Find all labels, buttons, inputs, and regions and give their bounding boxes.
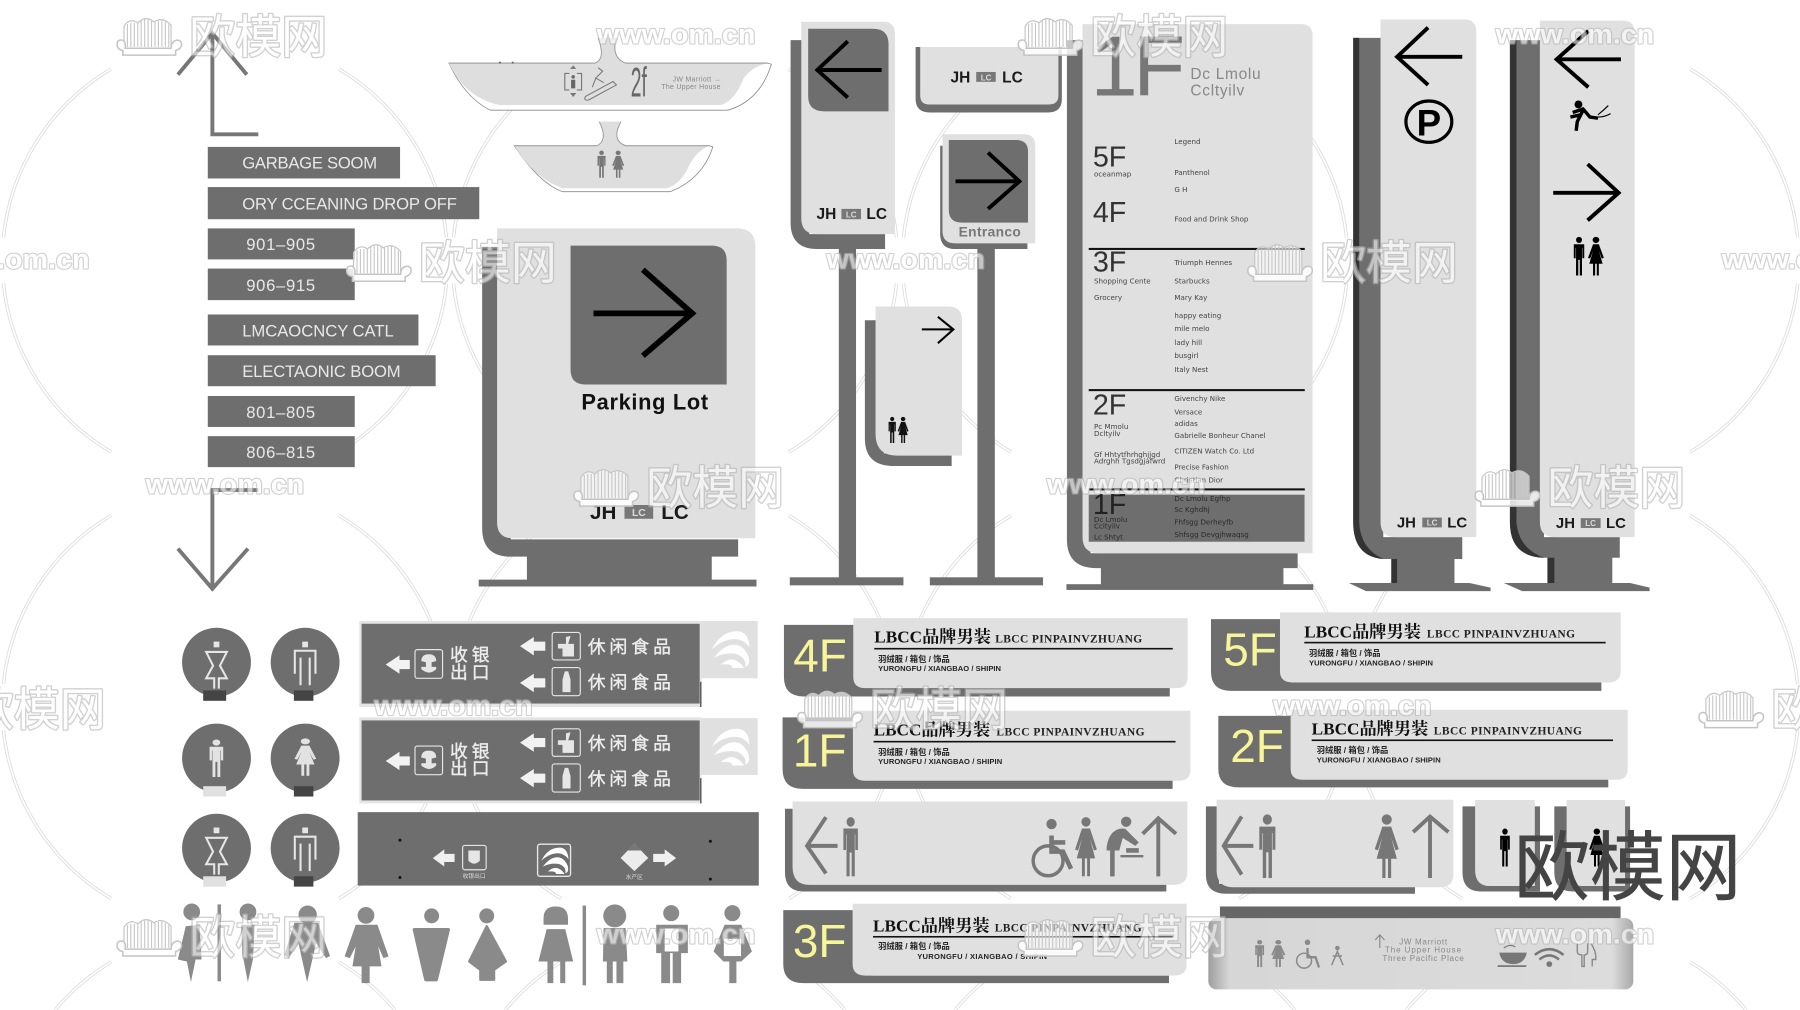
label: garbage room xyxy=(208,147,400,178)
floor sign: 1F: LBCC PINPAINVZHUANG xyxy=(996,727,1145,739)
watermarks: logo and url: 欧模网 xyxy=(870,683,1008,735)
wall sign: JH LC: LC xyxy=(1002,70,1023,87)
ground floor highlighted block: Fhfsgg Derheyfb xyxy=(1174,518,1234,527)
tenant list: mile melo xyxy=(1174,324,1210,333)
floor sign: 4F xyxy=(784,618,1188,696)
watermarks: logo and url: 欧模网 xyxy=(1091,912,1228,964)
label: electronic room xyxy=(208,355,436,386)
icon: restroom people xyxy=(1574,237,1604,275)
brand: JH LC: LC xyxy=(1606,515,1626,532)
floor sign: 2F: 2F xyxy=(1230,720,1284,772)
text: direction: The Upper House xyxy=(1385,946,1462,955)
watermarks: logo and url: www.om.cn xyxy=(1495,918,1654,949)
floor descriptions xyxy=(1094,170,1165,466)
icon: parking P xyxy=(1406,101,1452,143)
icon: escalator xyxy=(585,68,616,100)
floor sign: 1F: LBCC品牌男装 xyxy=(874,720,990,740)
floor numbers xyxy=(1093,141,1126,421)
floor sign: 5F: LBCC品牌男装 xyxy=(1304,622,1421,642)
watermarks: logo and url: 欧模网 xyxy=(189,11,327,63)
floor sign: 5F: LBCC PINPAINVZHUANG xyxy=(1427,629,1575,641)
floor sign: 4F: YURONGFU / XIANGBAO / SHIPIN xyxy=(878,664,1001,673)
label: 806-815 xyxy=(208,436,355,467)
floor sign: 2F: YURONGFU / XIANGBAO / SHIPIN xyxy=(1317,756,1441,765)
watermarks: logo and url: www.om.cn xyxy=(1272,690,1432,721)
tenant list: Legend xyxy=(1174,137,1200,146)
floor sign: 5F: YURONGFU / XIANGBAO / SHIPIN xyxy=(1309,659,1433,668)
floor descriptions: Adrghh Tgsdgjafwrd xyxy=(1094,457,1165,466)
pictogram: half man xyxy=(178,903,202,982)
floor sign: 3F: 羽绒服 / 箱包 / 饰品 xyxy=(878,941,950,951)
floor sign: 1F: YURONGFU / XIANGBAO / SHIPIN xyxy=(878,757,1002,766)
tenant list: Precise Fashion xyxy=(1174,462,1229,471)
label: 906-915: 906–915 xyxy=(246,276,315,295)
supermarket hanging sign 1: 出口 xyxy=(450,662,494,682)
text: direction: Three Pacific Place xyxy=(1382,954,1465,963)
watermarks: logo and url: 欧模网 xyxy=(1091,11,1228,63)
watermarks: logo and url: 欧模网 xyxy=(419,237,557,289)
ground floor highlighted block: Shfsgg Devgjhwaqsg xyxy=(1174,530,1249,539)
watermarks: logo and url: www.om.cn xyxy=(596,19,755,50)
pictogram: man with round head xyxy=(603,904,627,983)
floor sign: 1F: 羽绒服 / 箱包 / 饰品 xyxy=(878,747,950,757)
tenant list xyxy=(1173,137,1266,485)
text: entrance: Entranco xyxy=(959,224,1021,239)
sign: parking lot xyxy=(479,228,757,586)
pictogram: woman with apron xyxy=(714,905,752,983)
floor sign: 3F: LBCC品牌男装 xyxy=(873,915,990,935)
floor sign: 1F: 1F xyxy=(793,725,846,777)
tenant list: Christian Dior xyxy=(1174,476,1223,485)
floor sign: 5F: 5F xyxy=(1223,624,1277,676)
label: lmcaocncy catl: LMCAOCNCY CATL xyxy=(242,321,394,340)
floor sign: 2F: LBCC PINPAINVZHUANG xyxy=(1434,726,1582,738)
supermarket hanging sign 1: 休闲食品 xyxy=(588,637,675,657)
round sign: man solid xyxy=(182,724,251,797)
icon: restroom and accessibility xyxy=(1255,940,1343,968)
heading: 1F: 1F xyxy=(1091,18,1182,113)
tenant list: CITIZEN Watch Co. Ltd xyxy=(1174,446,1254,455)
label: 901-905 xyxy=(208,228,355,259)
supermarket long sign xyxy=(358,812,759,886)
round sign: woman outline xyxy=(182,814,251,887)
wall sign: JH LC xyxy=(916,47,1062,112)
supermarket hanging sign 2: 休闲食品 xyxy=(588,733,675,753)
watermarks: logo and url: www.om.cn xyxy=(1046,469,1205,500)
brand: JH LC xyxy=(1556,515,1626,532)
brand: JH LC: LC xyxy=(866,206,887,223)
label: dry cleaning xyxy=(208,187,479,219)
brand: JH LC xyxy=(590,501,689,524)
label: dry cleaning: ORY CCEANING DROP OFF xyxy=(242,194,457,213)
tenant list: Mary Kay xyxy=(1174,293,1207,302)
pictogram: dress figure xyxy=(345,907,389,983)
watermarks: logo and url: 欧模网 xyxy=(1320,237,1458,289)
icon: cup wifi cutlery xyxy=(1498,943,1596,967)
tenant list: happy eating xyxy=(1174,311,1221,320)
supermarket hanging sign 1: 休闲食品 xyxy=(588,673,675,693)
tenant list: G H xyxy=(1174,185,1187,194)
supermarket hanging sign 2: 休闲食品 xyxy=(588,769,675,789)
tenant list: Italy Nest xyxy=(1174,365,1208,374)
round sign: man outline xyxy=(271,814,340,887)
ground floor highlighted block: Dc Lmolu Egfhp xyxy=(1174,494,1231,503)
restroom directional sign wide xyxy=(785,801,1187,891)
brand: JH LC: LC xyxy=(1585,519,1596,528)
label: lmcaocncy catl xyxy=(208,314,418,345)
watermarks: logo and url: 欧模网 xyxy=(1547,462,1685,514)
small door sign: man xyxy=(1462,800,1540,891)
round sign: woman solid xyxy=(271,724,340,797)
floor sign: 3F: 3F xyxy=(793,915,846,967)
label: 906-915 xyxy=(208,269,355,300)
lobby desk sign xyxy=(1208,906,1633,989)
floor sign: 2F: 羽绒服 / 箱包 / 饰品 xyxy=(1317,745,1388,755)
floor sign: 3F: LBCC PINPAINVZHUANG xyxy=(995,922,1142,934)
tenant list: Food and Drink Shop xyxy=(1174,215,1249,224)
room directory labels xyxy=(208,147,479,467)
hanging sign: elevator and floor: 2f xyxy=(631,59,647,105)
icon: wheelchair xyxy=(1033,819,1071,876)
arrow: up xyxy=(178,33,258,134)
large watermark text: 欧模网 xyxy=(1514,806,1741,916)
supermarket hanging sign 2 xyxy=(359,717,758,803)
floor sign: 1F xyxy=(783,711,1190,789)
icon: running figure xyxy=(1570,101,1611,131)
watermarks: logo and url: 欧模网 xyxy=(646,462,784,514)
arrow: down xyxy=(178,490,258,589)
pictogram: man with apron xyxy=(656,905,688,983)
floor descriptions: oceanmap xyxy=(1094,170,1132,179)
icon: elevator xyxy=(565,65,582,97)
ground floor highlighted block: Dc Lmolu xyxy=(1094,515,1127,524)
floor sign: 3F: YURONGFU / XIANGBAO / SHIPIN xyxy=(917,952,1047,961)
pictogram row xyxy=(178,903,752,985)
floor numbers: 2F xyxy=(1093,389,1126,421)
floor descriptions: Shopping Cente xyxy=(1094,276,1151,285)
brand: JH LC: JH xyxy=(1397,514,1416,531)
watermarks: logo and url: www.om.cn xyxy=(825,244,985,275)
floor sign: 2F: LBCC品牌男装 xyxy=(1312,719,1428,739)
restroom directional sign short xyxy=(1206,800,1453,894)
heading: 1F xyxy=(1091,18,1261,113)
floor descriptions: Pc Mmolu xyxy=(1094,422,1128,431)
brand: JH LC xyxy=(1397,514,1467,531)
brand: JH LC: LC xyxy=(1447,514,1467,531)
floor sign: 4F: LBCC PINPAINVZHUANG xyxy=(995,634,1142,646)
label: garbage room: GARBAGE SOOM xyxy=(242,154,377,173)
ground floor highlighted block xyxy=(1089,489,1305,542)
brand: JH LC: LC xyxy=(846,210,857,219)
hanging sign: elevator and floor: The Upper House xyxy=(661,84,721,91)
brand: JH LC: LC xyxy=(661,501,689,524)
restroom round signs xyxy=(182,628,340,887)
floor sign: 5F: 羽绒服 / 箱包 / 饰品 xyxy=(1309,648,1381,658)
pylon: parking xyxy=(1349,20,1491,591)
floor sign: 4F: LBCC品牌男装 xyxy=(874,627,991,647)
brand: JH LC: JH xyxy=(1556,515,1575,532)
watermarks: logo and url: www.om.cn xyxy=(145,469,304,500)
tenant list: Triumph Hennes xyxy=(1173,258,1232,267)
pictogram: triangle woman xyxy=(469,908,506,980)
floor numbers: 4F xyxy=(1093,197,1126,229)
brand: JH LC xyxy=(816,206,887,223)
heading: 1F: Dc Lmolu xyxy=(1190,66,1261,83)
small door sign: woman xyxy=(1554,800,1630,891)
pictogram: half woman xyxy=(240,903,256,982)
supermarket hanging sign 1 xyxy=(359,621,758,707)
watermarks: logo and url: www.om.cn xyxy=(373,690,533,721)
heading: 1F: Ccltyilv xyxy=(1190,82,1245,99)
hanging sign: elevator and floor: JW Marriott → xyxy=(673,76,721,83)
pictogram: triangle man xyxy=(414,908,448,980)
tenant list: lady hill xyxy=(1174,338,1202,347)
label: 901-905: 901–905 xyxy=(246,235,315,254)
wall sign: JH LC: JH xyxy=(950,70,970,87)
wall sign: JH LC: LC xyxy=(981,73,992,82)
floor sign: 4F: 4F xyxy=(793,629,847,681)
supermarket long sign: 水产区 xyxy=(626,873,643,881)
small sign: restroom arrow xyxy=(865,306,962,466)
text: direction xyxy=(1375,935,1465,963)
pylon: fire exit and restroom xyxy=(1504,21,1650,591)
tenant list: Givenchy Nike xyxy=(1174,394,1225,403)
label: 806-815: 806–815 xyxy=(246,443,315,462)
round sign: man outline xyxy=(271,628,340,701)
tenant list: adidas xyxy=(1174,419,1198,428)
pictogram: woman with hair xyxy=(538,906,573,983)
tenant list: busgirl xyxy=(1174,351,1198,360)
watermarks: logo and url: www.om.cn xyxy=(596,918,755,949)
brand: JH LC: JH xyxy=(590,501,616,524)
round sign: woman outline xyxy=(182,628,251,701)
hanging sign: restroom xyxy=(514,122,713,192)
supermarket hanging sign 2: 收银 xyxy=(450,742,494,761)
floor sign: 4F: 羽绒服 / 箱包 / 饰品 xyxy=(878,654,950,664)
pole sign: entrance xyxy=(930,134,1043,585)
label: 801-805 xyxy=(208,396,355,427)
ground floor highlighted block: Ccltyilv xyxy=(1094,522,1120,531)
watermarks: logo and url: www.om.cn xyxy=(1495,19,1654,50)
text: direction: JW Marriott xyxy=(1399,938,1448,947)
floor sign: 2F xyxy=(1218,710,1628,787)
label: electronic room: ELECTAONIC BOOM xyxy=(242,362,401,381)
label: 801-805: 801–805 xyxy=(246,403,315,422)
tenant list: Panthenol xyxy=(1174,168,1210,177)
icon: baby changing xyxy=(1107,817,1143,876)
pictogram: suit figure xyxy=(285,906,330,982)
tenant list: Gabrielle Bonheur Chanel xyxy=(1174,431,1266,440)
floor numbers: 5F xyxy=(1093,141,1126,173)
floor sign: 5F xyxy=(1211,612,1621,691)
brand: JH LC: LC xyxy=(1427,519,1438,528)
floor numbers: 3F xyxy=(1093,246,1126,278)
tenant list: Starbucks xyxy=(1174,276,1210,285)
supermarket hanging sign 2: 出口 xyxy=(450,759,494,779)
supermarket long sign: 收银出口 xyxy=(463,872,486,880)
tenant list: Versace xyxy=(1174,407,1202,416)
brand: JH LC: JH xyxy=(816,206,836,223)
supermarket hanging sign 1: 收银 xyxy=(450,645,494,665)
icon: parking P: P xyxy=(1417,102,1441,143)
brand: JH LC: LC xyxy=(632,508,646,519)
ground floor highlighted block: Sc Kghdhj xyxy=(1174,505,1210,514)
floor sign: 3F xyxy=(783,904,1187,983)
watermarks: logo and url: 欧模网 xyxy=(189,912,327,964)
pole sign: left arrow xyxy=(790,22,903,585)
hanging sign: elevator and floor xyxy=(449,38,771,110)
floor descriptions: Grocery xyxy=(1094,293,1122,302)
floor descriptions: Gf Hhtytfhrhghjjgd xyxy=(1094,450,1160,459)
text: parking lot: Parking Lot xyxy=(581,390,709,415)
floor descriptions: Dcltyilv xyxy=(1094,429,1121,438)
ground floor highlighted block: 1F xyxy=(1093,489,1126,521)
floor directory totem xyxy=(1066,18,1313,590)
ground floor highlighted block: Lc Shtyt xyxy=(1094,532,1123,541)
